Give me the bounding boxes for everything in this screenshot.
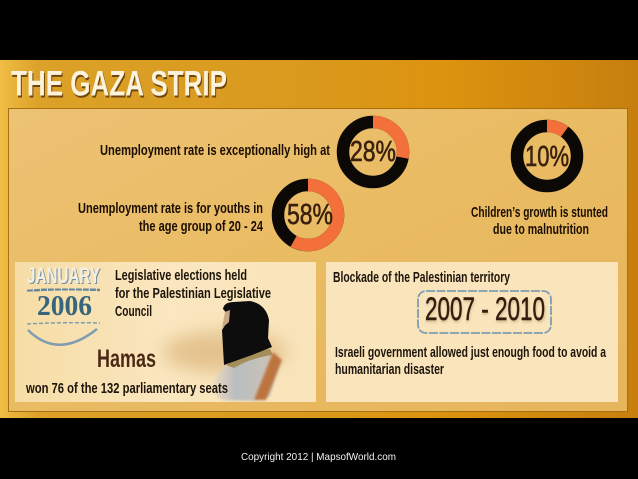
election text: Council bbox=[115, 303, 152, 320]
title: THE GAZA STRIP bbox=[11, 64, 227, 104]
title: THE GAZA STRIP bbox=[12, 66, 228, 106]
main panel bbox=[8, 108, 628, 412]
stat: children 10% bbox=[471, 126, 608, 238]
seats text: won 76 of the 132 parliamentary seats bbox=[25, 380, 228, 397]
stat: unemployment 28%: Unemployment rate is exceptionally high at bbox=[100, 142, 330, 159]
donut 58% bbox=[278, 185, 338, 245]
stat: unemployment 28% bbox=[100, 122, 403, 182]
copyright footer: Copyright 2012 | MapsofWorld.com bbox=[241, 451, 396, 463]
election text: for the Palestinian Legislative bbox=[115, 285, 271, 302]
background band bbox=[0, 60, 638, 418]
stamp: January 2006 bbox=[27, 263, 101, 345]
stamp: 2007 - 2010: 2007 - 2010 bbox=[425, 291, 545, 327]
desert haze bbox=[163, 332, 287, 372]
stat: youth unemployment 58%: the age group of 20 - 24 bbox=[139, 218, 263, 235]
donut 10%: 10% bbox=[525, 141, 569, 173]
donut 58%: 58% bbox=[287, 199, 333, 231]
blockade description: humanitarian disaster bbox=[335, 361, 444, 378]
election text: Legislative elections held bbox=[115, 267, 247, 284]
stamp: January 2006: JANUARY bbox=[28, 264, 101, 289]
election text bbox=[115, 267, 271, 320]
blockade heading: Blockade of the Palestinian territory bbox=[333, 269, 510, 286]
stamp: 2007 - 2010 bbox=[418, 291, 551, 333]
blockade description bbox=[335, 344, 606, 378]
stamp: January 2006: 2006 bbox=[37, 291, 92, 322]
donut 28%: 28% bbox=[350, 136, 396, 168]
Hamas heading: Hamas bbox=[97, 345, 156, 373]
stat: children 10%: due to malnutrition bbox=[493, 221, 589, 238]
stamp: 2007 - 2010: 2007 - 2010 bbox=[425, 293, 546, 329]
donut 28% bbox=[343, 122, 403, 182]
stat: youth unemployment 58%: Unemployment rate is for youths in bbox=[78, 200, 263, 217]
panel: Hamas election bbox=[15, 262, 316, 402]
stamp: January 2006: JANUARY bbox=[27, 263, 100, 288]
stat: youth unemployment 58% bbox=[78, 185, 338, 245]
panel: blockade bbox=[326, 262, 618, 402]
figure: masked man bbox=[212, 301, 282, 401]
